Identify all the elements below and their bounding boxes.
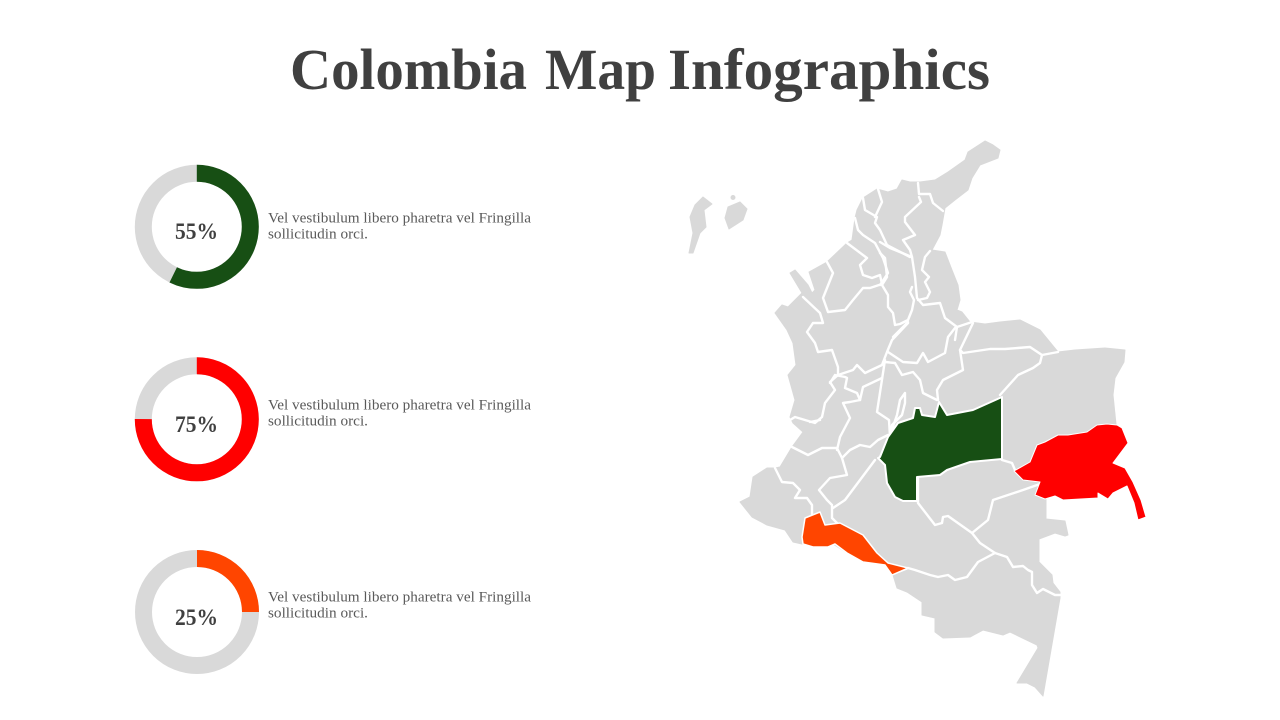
text block: second description: Vel vestibulum libero pharetra vel Fringilla — [268, 398, 531, 414]
map: highlighted orange department — [802, 512, 908, 575]
text block: first description — [268, 210, 531, 242]
text block: first description: Vel vestibulum libero pharetra vel Fringilla — [268, 210, 531, 226]
donut chart: 75% — [143, 366, 250, 473]
map: department borders — [775, 183, 1060, 595]
text block: first description: sollicitudin orci. — [268, 226, 368, 242]
title: Colombia — [290, 37, 527, 102]
text block: third description: sollicitudin orci. — [268, 606, 368, 622]
map: island San Andres — [689, 197, 712, 253]
donut chart: 55% — [143, 173, 250, 280]
donut chart: 55%: 55% — [175, 219, 218, 244]
text block: second description: sollicitudin orci. — [268, 414, 368, 430]
donut chart: 75%: 75% — [175, 412, 218, 437]
map: highlighted red department — [1014, 424, 1146, 520]
text block: third description — [268, 590, 531, 622]
map: mainland silhouette — [740, 141, 1125, 696]
title: Infographics — [668, 37, 990, 102]
donut chart: 25%: 25% — [175, 605, 218, 630]
donut chart: 25% — [144, 558, 250, 666]
map: island Providencia — [725, 196, 747, 229]
title — [290, 37, 990, 102]
title: Map — [545, 37, 656, 102]
map: highlighted green department — [878, 397, 1002, 501]
map of Colombia — [689, 141, 1146, 696]
text block: second description — [268, 398, 531, 430]
text block: third description: Vel vestibulum libero pharetra vel Fringilla — [268, 590, 531, 606]
